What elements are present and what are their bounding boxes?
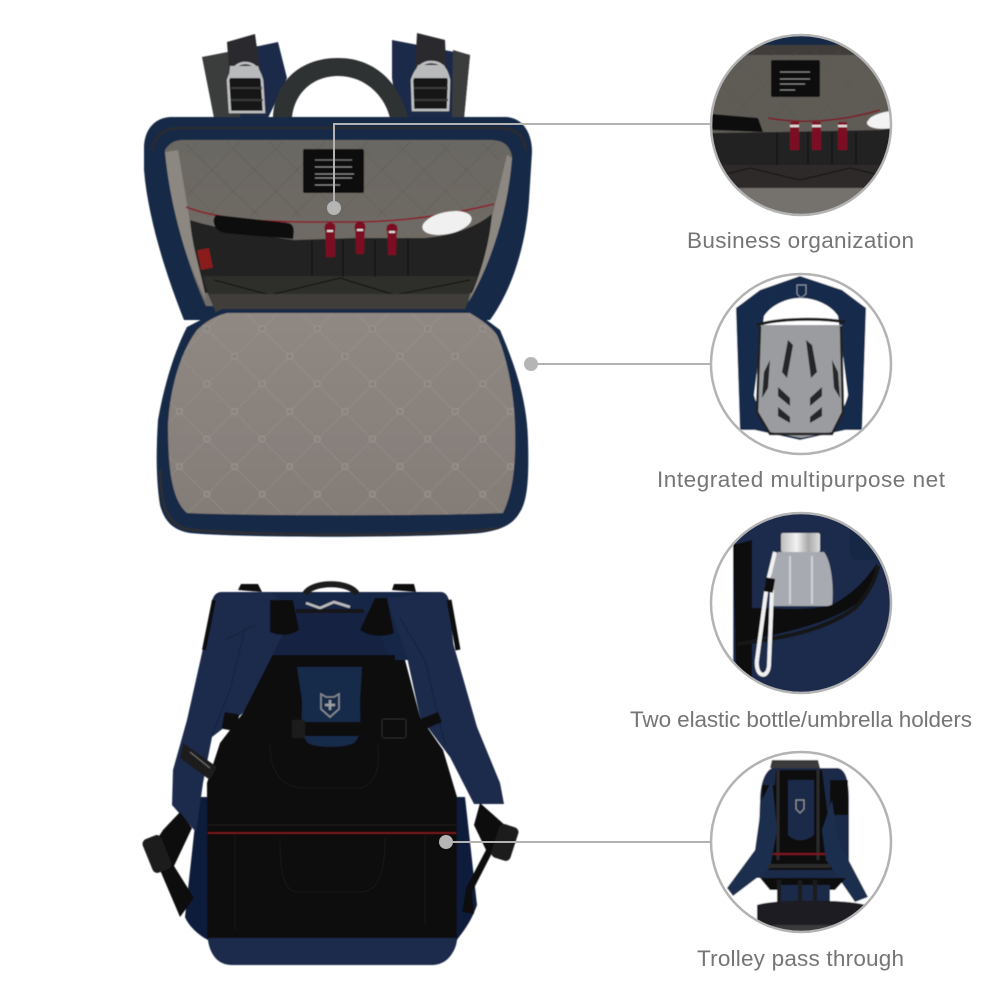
detail circle: multipurpose net with helmet xyxy=(710,273,892,455)
lower webbing left xyxy=(150,812,194,917)
label: bottle holders: Two elastic bottle/umbrella holders xyxy=(630,707,972,732)
detail circle: trolley pass through xyxy=(710,752,892,934)
red line xyxy=(208,832,456,834)
label: integrated net: Integrated multipurpose net xyxy=(657,467,946,492)
detail circle: business organization xyxy=(710,34,892,216)
phone xyxy=(214,215,294,239)
inner floor band xyxy=(208,294,470,313)
left side wall xyxy=(165,150,206,300)
logo shield xyxy=(321,694,339,717)
red trim xyxy=(186,204,494,222)
red zip pulls xyxy=(324,222,398,257)
shield panel xyxy=(297,667,362,747)
left shoulder strap xyxy=(172,592,294,832)
right shoulder strap xyxy=(387,592,504,804)
right side wall xyxy=(468,155,512,303)
faint pocket outlines xyxy=(235,745,425,930)
brand tag xyxy=(180,743,217,780)
bag body xyxy=(185,797,477,965)
bag shell: lower xyxy=(157,309,528,537)
laptop pad with diamond pattern xyxy=(168,313,515,515)
lanyard xyxy=(757,552,775,675)
label: trolley: Trolley pass through xyxy=(697,946,904,971)
lower webbing right xyxy=(462,803,510,914)
organizer pocket xyxy=(190,214,492,293)
black back panel xyxy=(207,660,457,938)
buckle left xyxy=(228,63,264,112)
bag top and upper interior xyxy=(205,592,455,660)
callout line: trolley xyxy=(439,835,711,849)
label: business organization: Business organization xyxy=(687,228,914,253)
bag shell: upper xyxy=(144,117,532,320)
open backpack: front view xyxy=(144,33,532,537)
buckle right xyxy=(412,62,449,110)
shoulder straps and top handle xyxy=(202,33,470,118)
back view of backpack xyxy=(141,584,520,965)
detail circle: bottle holder xyxy=(710,513,892,695)
brand label xyxy=(303,149,364,193)
upper lining xyxy=(165,140,512,306)
sternum strap xyxy=(222,712,442,738)
top webbing tabs xyxy=(238,584,416,592)
callout line: net xyxy=(524,357,711,371)
earbud case xyxy=(420,207,474,239)
callout line: business organization xyxy=(327,124,711,215)
